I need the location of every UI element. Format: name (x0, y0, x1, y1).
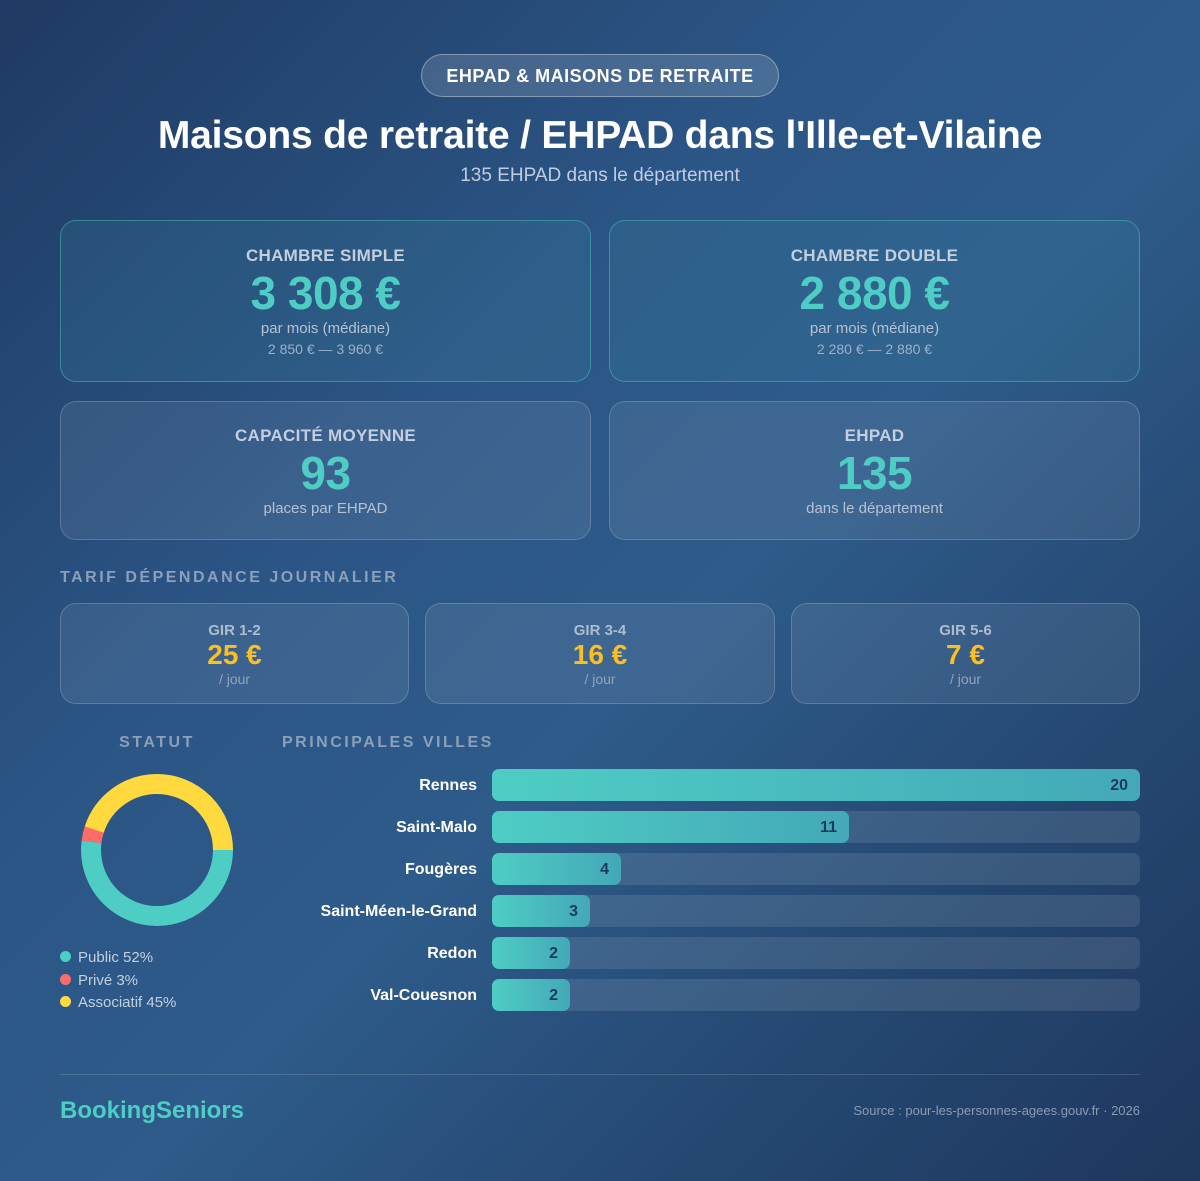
card: chambre double: 2 280 € — 2 880 € (817, 341, 932, 357)
legend: Public 52% (78, 949, 153, 966)
card: capacité (60, 401, 591, 540)
card: GIR 1-2 (60, 603, 409, 704)
card: GIR 1-2: / jour (219, 671, 250, 687)
bar chart (321, 769, 1140, 1011)
card: chambre simple: 3 308 € (250, 267, 400, 319)
bar chart: 2 (549, 945, 558, 962)
source: Source : pour-les-personnes-agees.gouv.fr · 2026 (853, 1103, 1140, 1118)
card: GIR 1-2: 25 € (207, 639, 262, 670)
bar chart: Val-Couesnon (370, 987, 477, 1004)
heading: principales villes: PRINCIPALES VILLES (282, 734, 494, 751)
card: chambre double: 2 880 € (800, 267, 949, 319)
card: GIR 1-2: GIR 1-2 (208, 622, 261, 639)
logo: BookingSeniors (60, 1097, 244, 1124)
card: GIR 5-6: GIR 5-6 (939, 622, 992, 639)
card: GIR 3-4: / jour (584, 671, 616, 687)
card: ehpad: 135 (837, 447, 912, 499)
card: GIR 5-6 (791, 603, 1140, 704)
bar chart: 2 (549, 987, 558, 1004)
card: ehpad: EHPAD (845, 426, 904, 445)
bar chart: Fougères (405, 861, 477, 878)
bar chart: Redon (427, 945, 477, 962)
title: Maisons de retraite / EHPAD dans l'Ille-et-Vilaine (158, 114, 1042, 157)
card: ehpad: dans le département (806, 500, 943, 517)
card: ehpad (609, 401, 1140, 540)
card: chambre double (609, 220, 1140, 382)
legend: Associatif 45% (78, 994, 176, 1011)
section: tarif dépendance: TARIF DÉPENDANCE JOURNALIER (60, 569, 398, 586)
bar chart: 3 (569, 903, 578, 920)
badge: EHPAD & MAISONS DE RETRAITE (446, 66, 754, 86)
card: GIR 3-4 (425, 603, 775, 704)
card: chambre simple: 2 850 € — 3 960 € (268, 341, 383, 357)
card: chambre simple: CHAMBRE SIMPLE (246, 246, 405, 265)
card: GIR 5-6: 7 € (946, 639, 985, 670)
card: GIR 3-4: GIR 3-4 (574, 622, 626, 639)
bar chart: 4 (600, 861, 609, 878)
bar chart: Saint-Malo (396, 819, 477, 836)
bar chart: 11 (820, 819, 837, 836)
bar chart: Rennes (419, 777, 477, 794)
card: GIR 3-4: 16 € (573, 639, 627, 670)
card: capacité: places par EHPAD (264, 500, 387, 517)
card: capacité: 93 (300, 447, 351, 499)
subtitle: 135 EHPAD dans le département (460, 165, 740, 186)
bar chart: Saint-Méen-le-Grand (321, 903, 477, 920)
card: capacité: CAPACITÉ MOYENNE (235, 426, 416, 445)
card: chambre simple: par mois (médiane) (261, 320, 390, 337)
card: GIR 5-6: / jour (950, 671, 981, 687)
card: chambre double: par mois (médiane) (810, 320, 939, 337)
badge (421, 54, 779, 97)
legend: Privé 3% (78, 972, 138, 988)
legend (60, 949, 176, 1011)
heading: statut: STATUT (119, 734, 195, 751)
donut chart (81, 774, 233, 926)
card: chambre simple (60, 220, 591, 382)
bar chart: 20 (1110, 777, 1128, 794)
card: chambre double: CHAMBRE DOUBLE (791, 246, 958, 265)
